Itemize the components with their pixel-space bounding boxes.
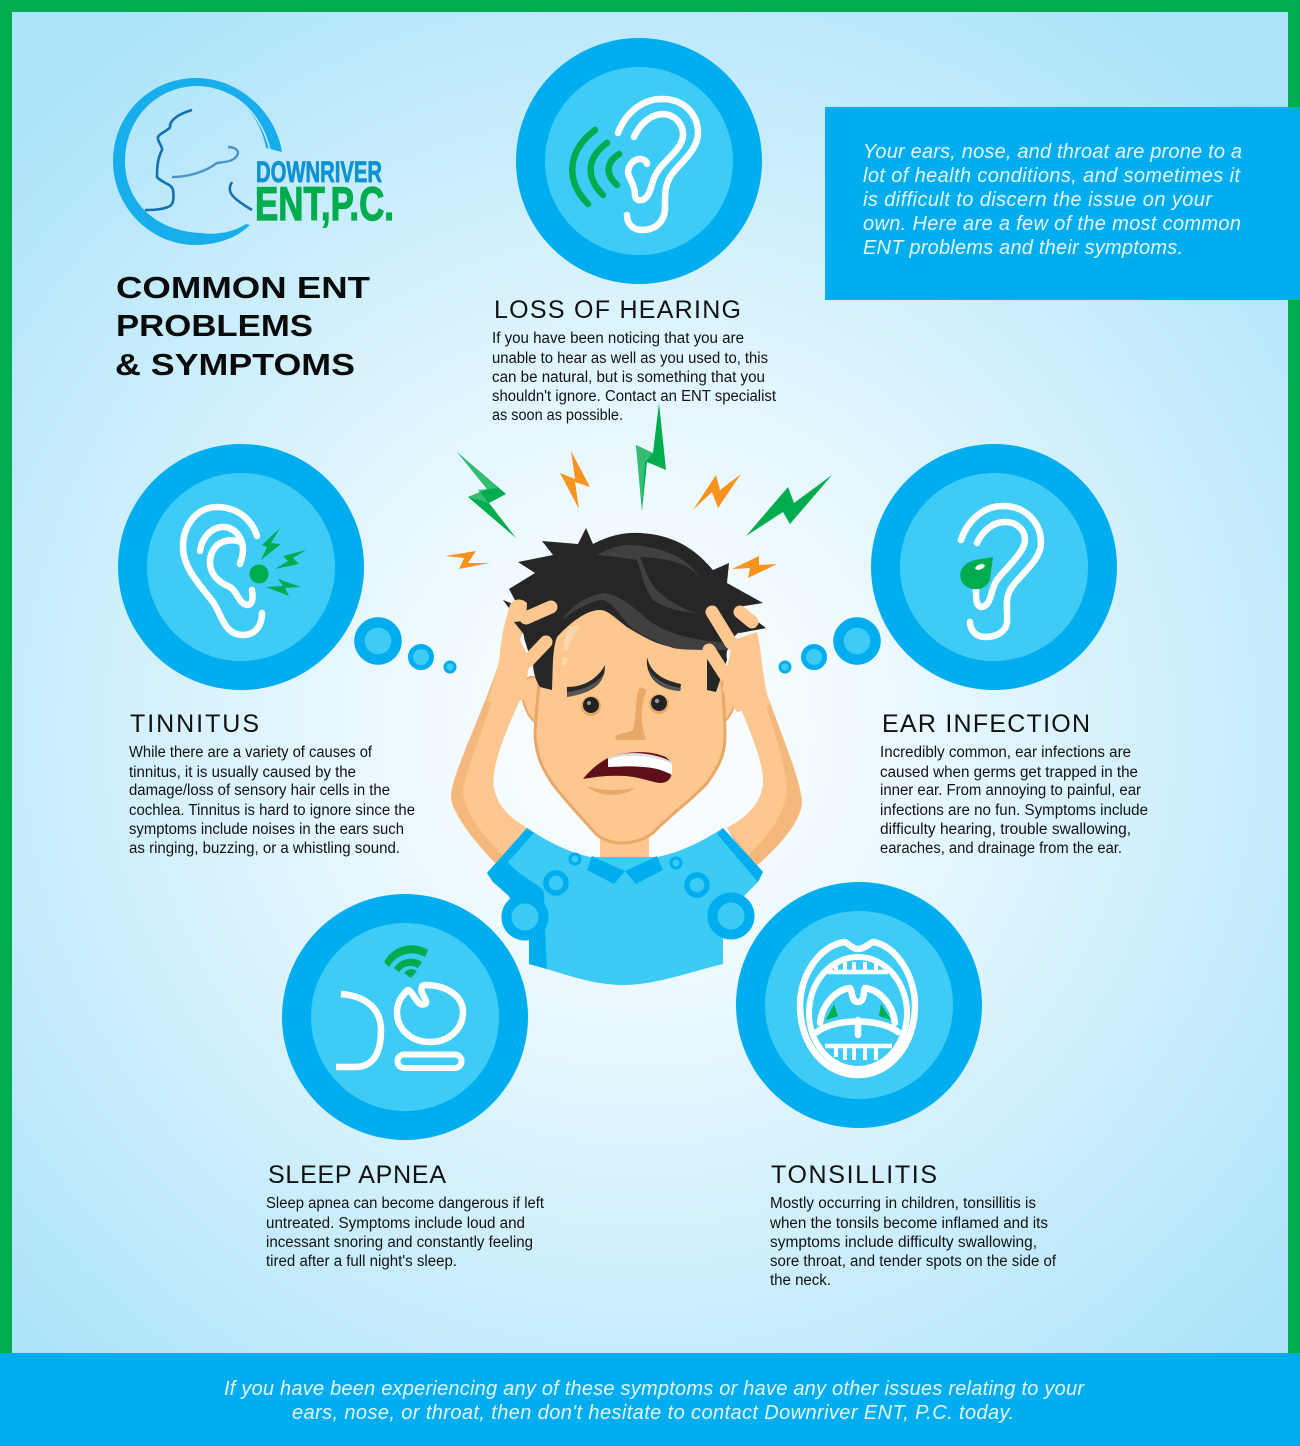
text: sleep apnea: untreated. Symptoms include loud and — [266, 1215, 525, 1232]
hands palm — [487, 599, 770, 712]
text: sleep apnea: tired after a full night's sleep. — [266, 1253, 457, 1270]
text: ear infection: caused when germs get trapped in the — [880, 764, 1138, 781]
title: COMMON ENT — [116, 270, 370, 305]
text: ear infection: inner ear. From annoying to painful, ear — [880, 782, 1141, 799]
text: ear infection: earaches, and drainage from the ear. — [880, 840, 1122, 857]
text: tonsillitis: the neck. — [770, 1272, 831, 1289]
forehead highlight — [561, 626, 581, 666]
text: tonsillitis: TONSILLITIS — [771, 1161, 937, 1189]
hair — [503, 528, 766, 692]
text: tinnitus: damage/loss of sensory hair cells in the — [129, 782, 390, 799]
text: tinnitus — [129, 710, 415, 857]
intro callout: ENT problems and their symptoms. — [863, 237, 1183, 259]
logo wordmark: ENT,P.C. — [255, 177, 394, 230]
shirt dots — [506, 854, 750, 936]
text: tonsillitis: Mostly occurring in children, tonsillitis is — [770, 1195, 1036, 1212]
neck — [600, 825, 649, 865]
panel: tonsillitis icon — [736, 882, 982, 1128]
title: PROBLEMS — [116, 308, 313, 343]
arms — [451, 650, 802, 870]
hair spikes over hands — [514, 617, 766, 642]
text: loss of hearing: as soon as possible. — [492, 407, 623, 424]
title: & SYMPTOMS — [115, 347, 355, 382]
eyebrows — [567, 657, 681, 697]
text: ear infection: Incredibly common, ear infections are — [880, 744, 1131, 761]
text: sleep apnea: SLEEP APNEA — [268, 1161, 446, 1189]
text: tonsillitis: when the tonsils become inflamed and its — [769, 1215, 1048, 1232]
text: tonsillitis — [769, 1161, 1057, 1289]
thought bubbles left — [360, 622, 455, 672]
fingers — [526, 607, 752, 675]
text: loss of hearing — [492, 296, 777, 424]
text: tinnitus: cochlea. Tinnitus is hard to ignore since the — [129, 802, 415, 819]
text: ear infection: infections are no fun. Symptoms include — [880, 802, 1148, 819]
text: loss of hearing: If you have been noticing that you are — [492, 330, 744, 347]
text: sleep apnea: incessant snoring and constantly feeling — [266, 1234, 533, 1251]
illustration: stressed man — [451, 528, 802, 985]
nose — [615, 687, 647, 740]
panel: loss of hearing icon — [516, 38, 762, 284]
intro callout — [825, 107, 1300, 300]
text: sleep apnea — [266, 1161, 545, 1270]
text: tinnitus: TINNITUS — [130, 710, 259, 738]
intro callout: own. Here are a few of the most common — [863, 213, 1241, 235]
logo wordmark: DOWNRIVER — [256, 156, 382, 189]
text: sleep apnea: Sleep apnea can become dangerous if left — [266, 1195, 545, 1212]
thought bubbles right — [780, 622, 876, 672]
collar — [587, 856, 625, 884]
intro callout: lot of health conditions, and sometimes it — [863, 165, 1241, 187]
shirt — [487, 828, 763, 985]
text: ear infection: EAR INFECTION — [882, 710, 1090, 738]
face — [535, 594, 725, 843]
panel: sleep apnea icon — [282, 894, 528, 1140]
text: loss of hearing: unable to hear as well as you used to, this — [492, 350, 768, 367]
text: ear infection — [880, 710, 1148, 857]
text: loss of hearing: can be natural, but is something that you — [492, 369, 765, 386]
text: ear infection: difficulty hearing, trouble swallowing, — [880, 821, 1131, 838]
text: tonsillitis: sore throat, and tender spots on the side of — [770, 1253, 1057, 1270]
footer call to action — [0, 1353, 1300, 1446]
text: tonsillitis: symptoms include difficulty swallowing, — [770, 1234, 1037, 1251]
logo: Downriver ENT — [113, 78, 394, 245]
panel: tinnitus icon — [118, 444, 364, 690]
lightning bolts around head — [445, 403, 832, 578]
footer call to action: If you have been experiencing any of these symptoms or have any other issues relating to your — [224, 1378, 1085, 1400]
intro callout: is difficult to discern the issue on your — [863, 189, 1213, 211]
eyes — [581, 694, 669, 716]
logo wordmark — [255, 156, 394, 230]
intro callout: Your ears, nose, and throat are prone to a — [863, 141, 1242, 163]
text: tinnitus: tinnitus, it is usually caused by the — [129, 764, 356, 781]
ears — [522, 676, 737, 724]
title — [115, 270, 370, 382]
text: tinnitus: as ringing, buzzing, or a whistling sound. — [129, 840, 400, 857]
panel: ear infection icon — [871, 444, 1117, 690]
footer call to action: ears, nose, or throat, then don't hesitate to contact Downriver ENT, P.C. today. — [292, 1402, 1014, 1424]
mouth — [583, 752, 672, 795]
text: loss of hearing: LOSS OF HEARING — [494, 296, 741, 324]
text: loss of hearing: shouldn't ignore. Contact an ENT specialist — [492, 388, 777, 405]
text: tinnitus: symptoms include noises in the ears such — [129, 821, 404, 838]
text: tinnitus: While there are a variety of causes of — [129, 744, 373, 761]
